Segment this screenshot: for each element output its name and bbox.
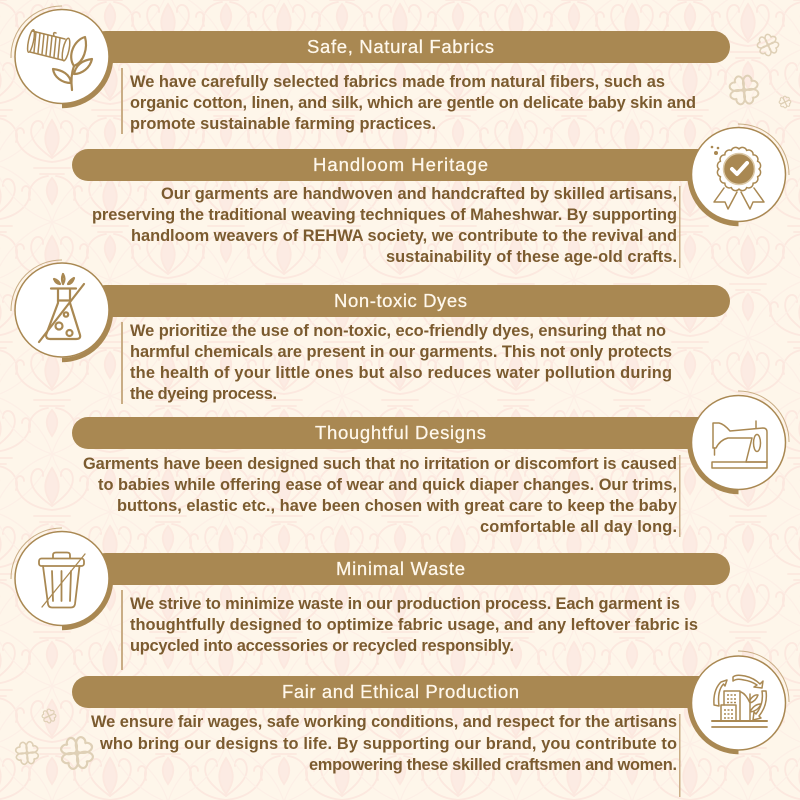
heading: Thoughtful Designs — [315, 422, 486, 443]
decorative clovers, bottom left — [12, 708, 99, 775]
body text — [92, 185, 677, 266]
heading bar — [90, 553, 730, 585]
body text: We ensure fair wages, safe working conditions, and respect for the artisans — [91, 713, 677, 731]
body text: harmful chemicals are present in our garments. This not only protects — [130, 343, 672, 361]
divider rule — [121, 322, 123, 404]
section: Non-toxic Dyes — [11, 260, 730, 404]
body text: promote sustainable farming practices. — [130, 115, 436, 133]
body text: thoughtfully designed to optimize fabric usage, and any leftover fabric is — [130, 616, 698, 634]
icon badge: spool and plant — [11, 6, 111, 106]
body text: organic cotton, linen, and silk, which are gentle on delicate baby skin and — [130, 94, 696, 112]
body text: empowering these skilled craftsmen and women. — [309, 756, 677, 774]
body text: who bring our designs to life. By supporting our brand, you contribute to — [99, 735, 677, 753]
icon badge: crossed-out bin — [11, 528, 111, 628]
body text: sustainability of these age-old crafts. — [386, 248, 677, 266]
icon badge: buildings, plant and recycling arrows — [690, 651, 789, 752]
section: Handloom Heritage — [72, 124, 789, 268]
body text: Garments have been designed such that no irritation or discomfort is caused — [83, 455, 677, 473]
body text: Our garments are handwoven and handcrafted by skilled artisans, — [161, 185, 677, 203]
body text: the dyeing process. — [130, 385, 277, 403]
heading bar — [90, 31, 730, 63]
body text — [130, 322, 672, 403]
heading bar — [72, 676, 722, 708]
heading: Safe, Natural Fabrics — [307, 36, 494, 57]
icon badge: rosette with check — [690, 124, 789, 224]
body text: comfortable all day long. — [480, 518, 677, 536]
divider rule — [121, 68, 123, 134]
icon badge: crossed-out flask — [11, 260, 111, 360]
heading: Handloom Heritage — [313, 154, 488, 175]
section: Minimal Waste — [11, 528, 730, 670]
body text: buttons, elastic etc., have been chosen with great care to keep the baby — [117, 497, 678, 515]
heading bar — [72, 417, 722, 449]
section: Thoughtful Designs — [72, 391, 789, 537]
decorative clovers, top right — [724, 32, 792, 110]
heading bar — [90, 285, 730, 317]
divider rule — [679, 714, 680, 797]
body text: upcycled into accessories or recycled responsibly. — [130, 637, 514, 655]
body text: We strive to minimize waste in our production process. Each garment is — [130, 595, 680, 613]
body text: We have carefully selected fabrics made from natural fibers, such as — [130, 73, 665, 91]
body text — [83, 455, 678, 536]
heading: Non-toxic Dyes — [334, 290, 467, 311]
divider rule — [121, 590, 123, 670]
body text: We prioritize the use of non-toxic, eco-friendly dyes, ensuring that no — [130, 322, 666, 340]
body text: preserving the traditional weaving techniques of Maheshwar. By supporting — [92, 206, 677, 224]
section: Safe, Natural Fabrics — [11, 6, 730, 134]
heading: Minimal Waste — [336, 558, 465, 579]
heading bar — [72, 149, 722, 181]
body text: to babies while offering ease of wear and quick diaper changes. Our trims, — [98, 476, 677, 494]
body text — [130, 595, 698, 655]
section: Fair and Ethical Production — [72, 651, 789, 797]
icon badge: sewing machine — [690, 391, 789, 492]
divider rule — [679, 186, 680, 268]
body text: the health of your little ones but also reduces water pollution during — [130, 364, 672, 382]
body text — [91, 713, 677, 774]
heading: Fair and Ethical Production — [282, 681, 519, 702]
divider rule — [679, 455, 680, 537]
body text: handloom weavers of REHWA society, we contribute to the revival and — [131, 227, 677, 245]
body text — [130, 73, 696, 133]
